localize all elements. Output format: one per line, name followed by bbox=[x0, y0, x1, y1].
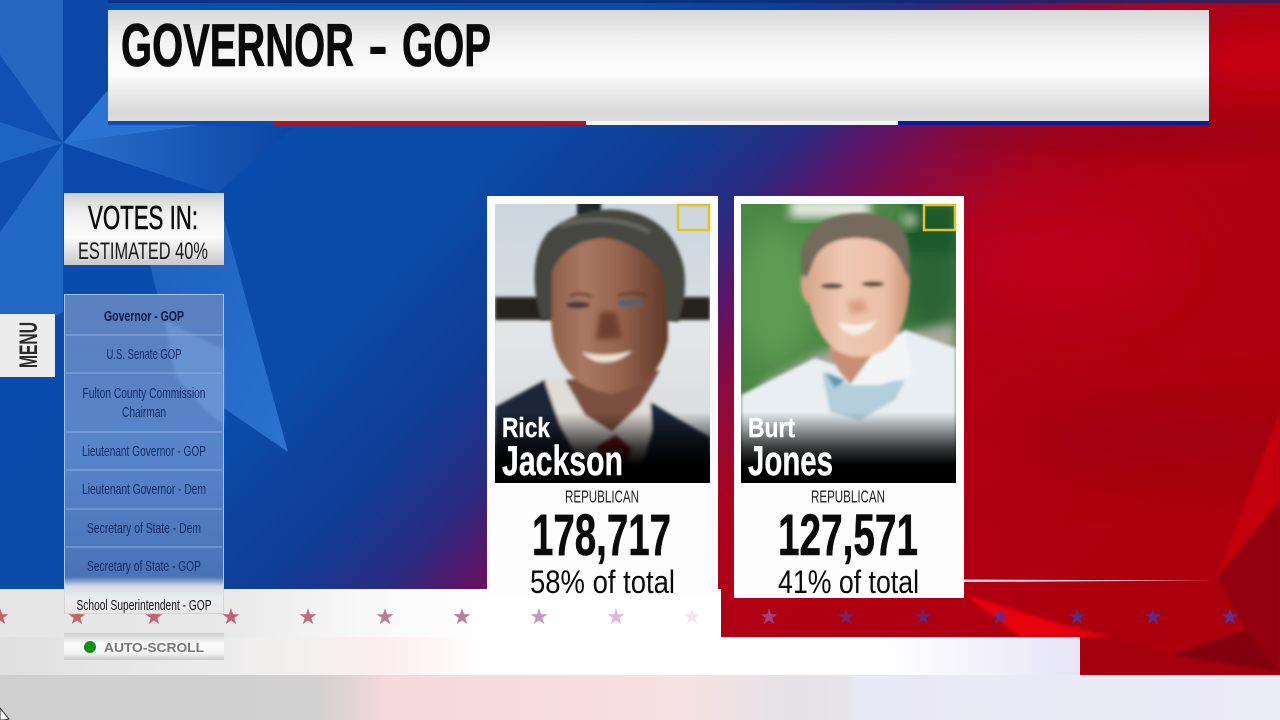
party and votes: REPUBLICAN bbox=[565, 486, 639, 506]
menu items: Secretary of State - Dem bbox=[87, 521, 201, 537]
menu items: Lieutenant Governor - GOP bbox=[82, 444, 206, 460]
name: Rick Jackson: Rick bbox=[502, 412, 551, 443]
portrait: Rick Jackson bbox=[495, 200, 710, 483]
star facets bbox=[0, 0, 293, 452]
menu items: U.S. Senate GOP bbox=[106, 347, 182, 363]
star row: ★ bbox=[529, 604, 549, 629]
star row: ★ bbox=[221, 604, 241, 629]
star row: ★ bbox=[836, 604, 856, 629]
star row: ★ bbox=[606, 604, 626, 629]
badge outline bbox=[924, 205, 955, 230]
auto-scroll toggle bbox=[64, 633, 224, 660]
title stripe bbox=[274, 121, 1209, 125]
votes in panel: VOTES IN: bbox=[88, 199, 198, 236]
menu items: Lieutenant Governor - Dem bbox=[82, 482, 206, 498]
party and votes bbox=[530, 486, 675, 600]
name: Burt Jones: Burt bbox=[748, 412, 795, 443]
star row: ★ bbox=[1143, 604, 1163, 629]
star row: ★ bbox=[990, 604, 1010, 629]
star row: ★ bbox=[682, 604, 702, 629]
votes in panel: ESTIMATED 40% bbox=[78, 238, 208, 265]
menu tab bbox=[0, 314, 55, 377]
red facets bbox=[964, 412, 1280, 675]
menu items: Governor - GOP bbox=[104, 309, 184, 325]
portrait: Burt Jones bbox=[737, 200, 966, 483]
title: - bbox=[368, 12, 388, 79]
menu items: Secretary of State - GOP bbox=[87, 559, 201, 575]
race menu list bbox=[64, 294, 224, 614]
party and votes: 58% of total bbox=[530, 564, 675, 600]
star row: ★ bbox=[144, 604, 164, 629]
candidate card: Burt Jones bbox=[734, 196, 966, 600]
bottom bands bbox=[0, 589, 1280, 720]
votes in panel bbox=[64, 193, 224, 265]
party and votes: 178,717 bbox=[532, 503, 671, 568]
cursor icon bbox=[0, 708, 9, 720]
party and votes: 127,571 bbox=[778, 503, 918, 568]
star row bbox=[0, 604, 1240, 629]
name: Burt Jones bbox=[748, 412, 833, 484]
auto-scroll toggle: AUTO-SCROLL bbox=[104, 640, 204, 655]
star row: ★ bbox=[67, 604, 87, 629]
star row: ★ bbox=[913, 604, 933, 629]
party and votes: 41% of total bbox=[778, 564, 919, 600]
title: GOP bbox=[402, 12, 491, 79]
red glows bbox=[940, 200, 1180, 320]
menu items: School Superintendent - GOP bbox=[76, 598, 212, 614]
party and votes bbox=[778, 486, 919, 600]
name: Burt Jones: Jones bbox=[748, 437, 833, 484]
light streak bbox=[964, 580, 1215, 582]
title bar bbox=[108, 10, 1209, 125]
menu tab: MENU bbox=[15, 322, 43, 368]
badge outline bbox=[678, 205, 709, 230]
star row: ★ bbox=[452, 604, 472, 629]
menu items: Fulton County Commission bbox=[82, 386, 206, 402]
star row: ★ bbox=[1220, 604, 1240, 629]
star row: ★ bbox=[1067, 604, 1087, 629]
menu items bbox=[76, 309, 212, 614]
star row: ★ bbox=[298, 604, 318, 629]
star row: ★ bbox=[375, 604, 395, 629]
name: Rick Jackson: Jackson bbox=[502, 437, 623, 484]
candidate card: Rick Jackson bbox=[487, 196, 718, 600]
party and votes: REPUBLICAN bbox=[811, 486, 885, 506]
name: Rick Jackson bbox=[502, 412, 623, 484]
menu items: Chairman bbox=[122, 405, 166, 421]
title: GOVERNOR bbox=[121, 12, 354, 79]
star row: ★ bbox=[759, 604, 779, 629]
